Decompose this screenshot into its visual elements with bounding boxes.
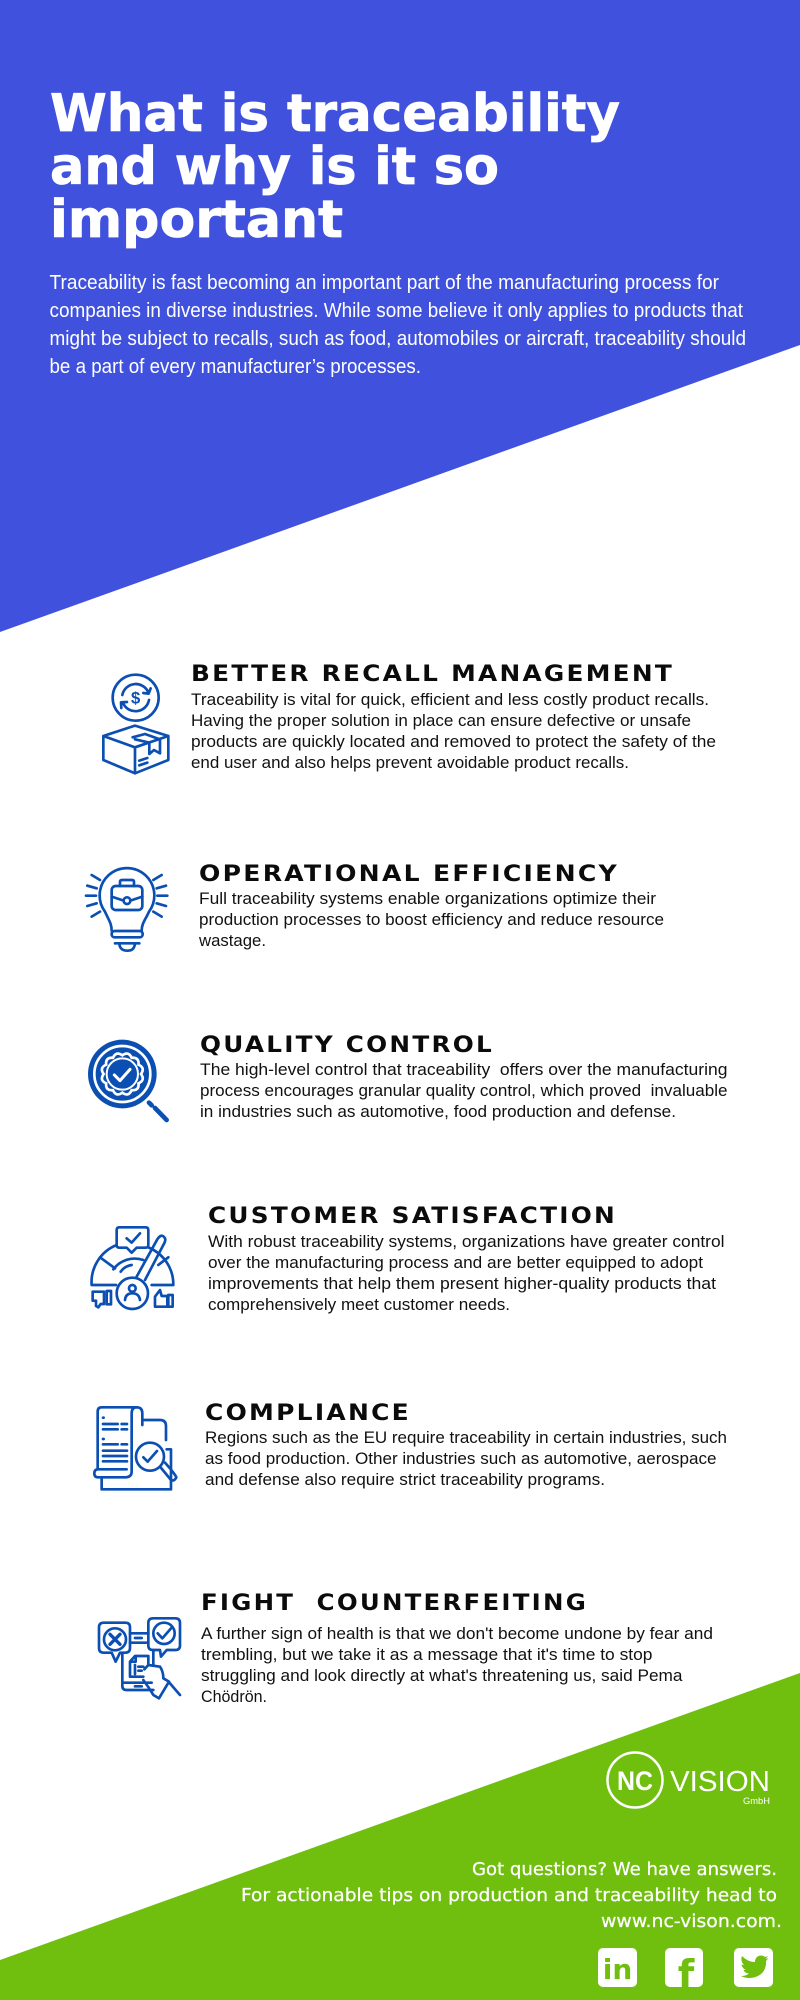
icon: coin cycle above parcel box: $ (131, 689, 141, 708)
intro text: might be subject to recalls, such as food, automobiles or aircraft, traceability should (50, 328, 746, 350)
text: operational efficiency: wastage. (198, 931, 266, 950)
text: customer satisfaction: With robust traceability systems, organizations have greater control (208, 1232, 724, 1251)
text: customer satisfaction (208, 1232, 724, 1314)
panel: quality control (88, 1033, 727, 1121)
icon: facebook: f (678, 1952, 695, 1996)
text: better recall management: products are quickly located and removed to protect the safety of the (191, 732, 716, 751)
header background: blue diagonal panel (0, 0, 800, 632)
footer call to action text: Got questions? We have answers. (472, 1859, 777, 1880)
text: compliance: as food production. Other industries such as automotive, aerospace (205, 1449, 716, 1468)
icon: twitter (734, 1948, 773, 1987)
text: better recall management (191, 690, 716, 772)
panel: better recall management (103, 662, 716, 773)
text: quality control: in industries such as automotive, food production and defense. (200, 1102, 676, 1121)
intro text: Traceability is fast becoming an important part of the manufacturing process for (50, 272, 719, 294)
text: operational efficiency (198, 889, 664, 950)
icon: phone with approve and reject bubbles (99, 1618, 180, 1698)
text: better recall management: Having the proper solution in place can ensure defective or unsafe (191, 711, 691, 730)
icon: satisfaction gauge (92, 1227, 173, 1309)
panel: customer satisfaction (92, 1204, 725, 1314)
footer call to action text: For actionable tips on production and traceability head to (241, 1885, 777, 1906)
text: fight counterfeiting: Chödrön. (201, 1687, 267, 1706)
intro text: be a part of every manufacturer’s processes. (50, 356, 421, 378)
heading: operational efficiency: OPERATIONAL EFFICIENCY (199, 862, 619, 887)
logo: NC Vision GmbH: GmbH (743, 1796, 770, 1806)
title (50, 84, 620, 250)
heading: fight counterfeiting: FIGHT COUNTERFEITING (201, 1591, 588, 1616)
panel: fight counterfeiting (99, 1591, 713, 1706)
title: important (50, 190, 343, 250)
icon: linkedin (598, 1948, 637, 1987)
heading: customer satisfaction: CUSTOMER SATISFACTION (208, 1204, 617, 1229)
footer background: green diagonal panel (0, 1673, 800, 2000)
logo: NC Vision GmbH: VISION (670, 1766, 770, 1798)
logo: NC Vision GmbH (608, 1752, 770, 1808)
icon: magnifier over quality badge (88, 1040, 167, 1120)
text: operational efficiency: Full traceability systems enable organizations optimize their (199, 889, 656, 908)
logo: NC Vision GmbH: NC (617, 1766, 653, 1796)
icon: light bulb with briefcase (86, 868, 167, 951)
icon: document with magnifier (94, 1407, 176, 1489)
text: fight counterfeiting: A further sign of health is that we don't become undone by fear and (201, 1624, 713, 1643)
text: customer satisfaction: comprehensively meet customer needs. (208, 1295, 510, 1314)
text: quality control: process encourages granular quality control, which proved invaluable (200, 1081, 728, 1100)
text: fight counterfeiting: struggling and look directly at what's threatening us, said Pema (201, 1666, 683, 1685)
footer call to action text (241, 1859, 782, 1932)
panel: operational efficiency (86, 862, 664, 951)
text: better recall management: Traceability is vital for quick, efficient and less costly product recalls. (191, 690, 709, 709)
text: customer satisfaction: improvements that help them present higher-quality products that (208, 1274, 716, 1293)
heading: quality control: QUALITY CONTROL (200, 1033, 494, 1058)
panel: compliance (94, 1401, 727, 1489)
text: compliance: and defense also require strict traceability programs. (205, 1470, 605, 1489)
intro text (50, 272, 746, 378)
footer call to action text: www.nc-vison.com. (601, 1911, 782, 1932)
icon: coin cycle above parcel box (103, 675, 168, 773)
heading: better recall management: BETTER RECALL MANAGEMENT (191, 662, 674, 687)
text: quality control: The high-level control that traceability offers over the manufacturing (200, 1060, 728, 1079)
title: What is traceability (50, 84, 620, 144)
text: compliance (205, 1428, 727, 1489)
title: and why is it so (50, 137, 499, 197)
text: fight counterfeiting: trembling, but we take it as a message that it's time to stop (201, 1645, 652, 1664)
icon: facebook (665, 1948, 703, 1996)
text: customer satisfaction: over the manufacturing process and are better equipped to adopt (208, 1253, 703, 1272)
text: operational efficiency: production processes to boost efficiency and reduce resource (199, 910, 664, 929)
text: quality control (200, 1060, 728, 1121)
icon: linkedin: in (603, 1953, 632, 1986)
text: fight counterfeiting (201, 1624, 713, 1706)
intro text: companies in diverse industries. While some believe it only applies to products that (50, 300, 743, 322)
text: better recall management: end user and also helps prevent avoidable product recalls. (191, 753, 629, 772)
heading: compliance: COMPLIANCE (205, 1401, 411, 1426)
text: compliance: Regions such as the EU require traceability in certain industries, such (205, 1428, 727, 1447)
